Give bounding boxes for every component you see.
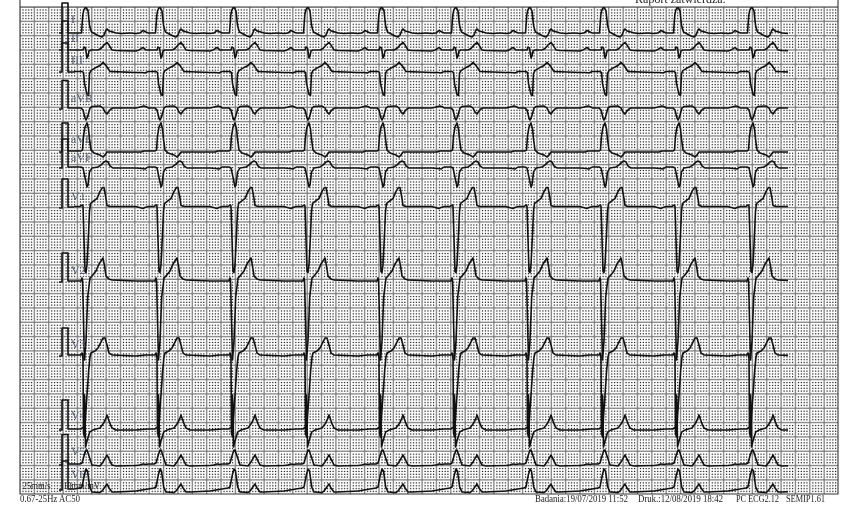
lead aVL: aVL — [71, 132, 92, 146]
lead V2 — [59, 253, 814, 360]
gain setting: 10mm/mV — [63, 481, 101, 492]
lead aVF — [59, 139, 814, 187]
lead III — [59, 43, 814, 96]
lead II: II — [71, 31, 79, 45]
exam date: Badania:19/07/2019 11:52 — [535, 494, 628, 505]
lead V1 — [59, 179, 814, 272]
lead V1: V1 — [71, 189, 86, 203]
lead I — [59, 3, 814, 37]
lead V2: V2 — [71, 263, 86, 277]
lead III: III — [71, 53, 83, 67]
lead I: I — [71, 12, 75, 26]
lead V6: V6 — [71, 467, 86, 481]
speed setting: 25mm/s — [22, 481, 51, 492]
filter settings: 0.67-25Hz AC50 — [20, 494, 80, 505]
lead aVL — [59, 123, 814, 157]
lead aVF: aVF — [71, 150, 92, 164]
lead V4: V4 — [71, 408, 86, 422]
lead V5 — [59, 434, 814, 466]
lead aVR — [59, 80, 814, 120]
print date: Druk.:12/08/2019 18:42 — [638, 494, 723, 505]
device version: SEMIP1.61 — [786, 494, 825, 505]
lead V5: V5 — [71, 444, 86, 458]
lead II — [59, 21, 814, 58]
lead V3 — [59, 328, 814, 437]
lead V3: V3 — [71, 337, 86, 351]
lead aVR: aVR — [71, 91, 93, 105]
lead V4 — [59, 395, 814, 447]
software version: PC ECG2.12 — [736, 494, 779, 505]
lead V6 — [59, 461, 814, 492]
